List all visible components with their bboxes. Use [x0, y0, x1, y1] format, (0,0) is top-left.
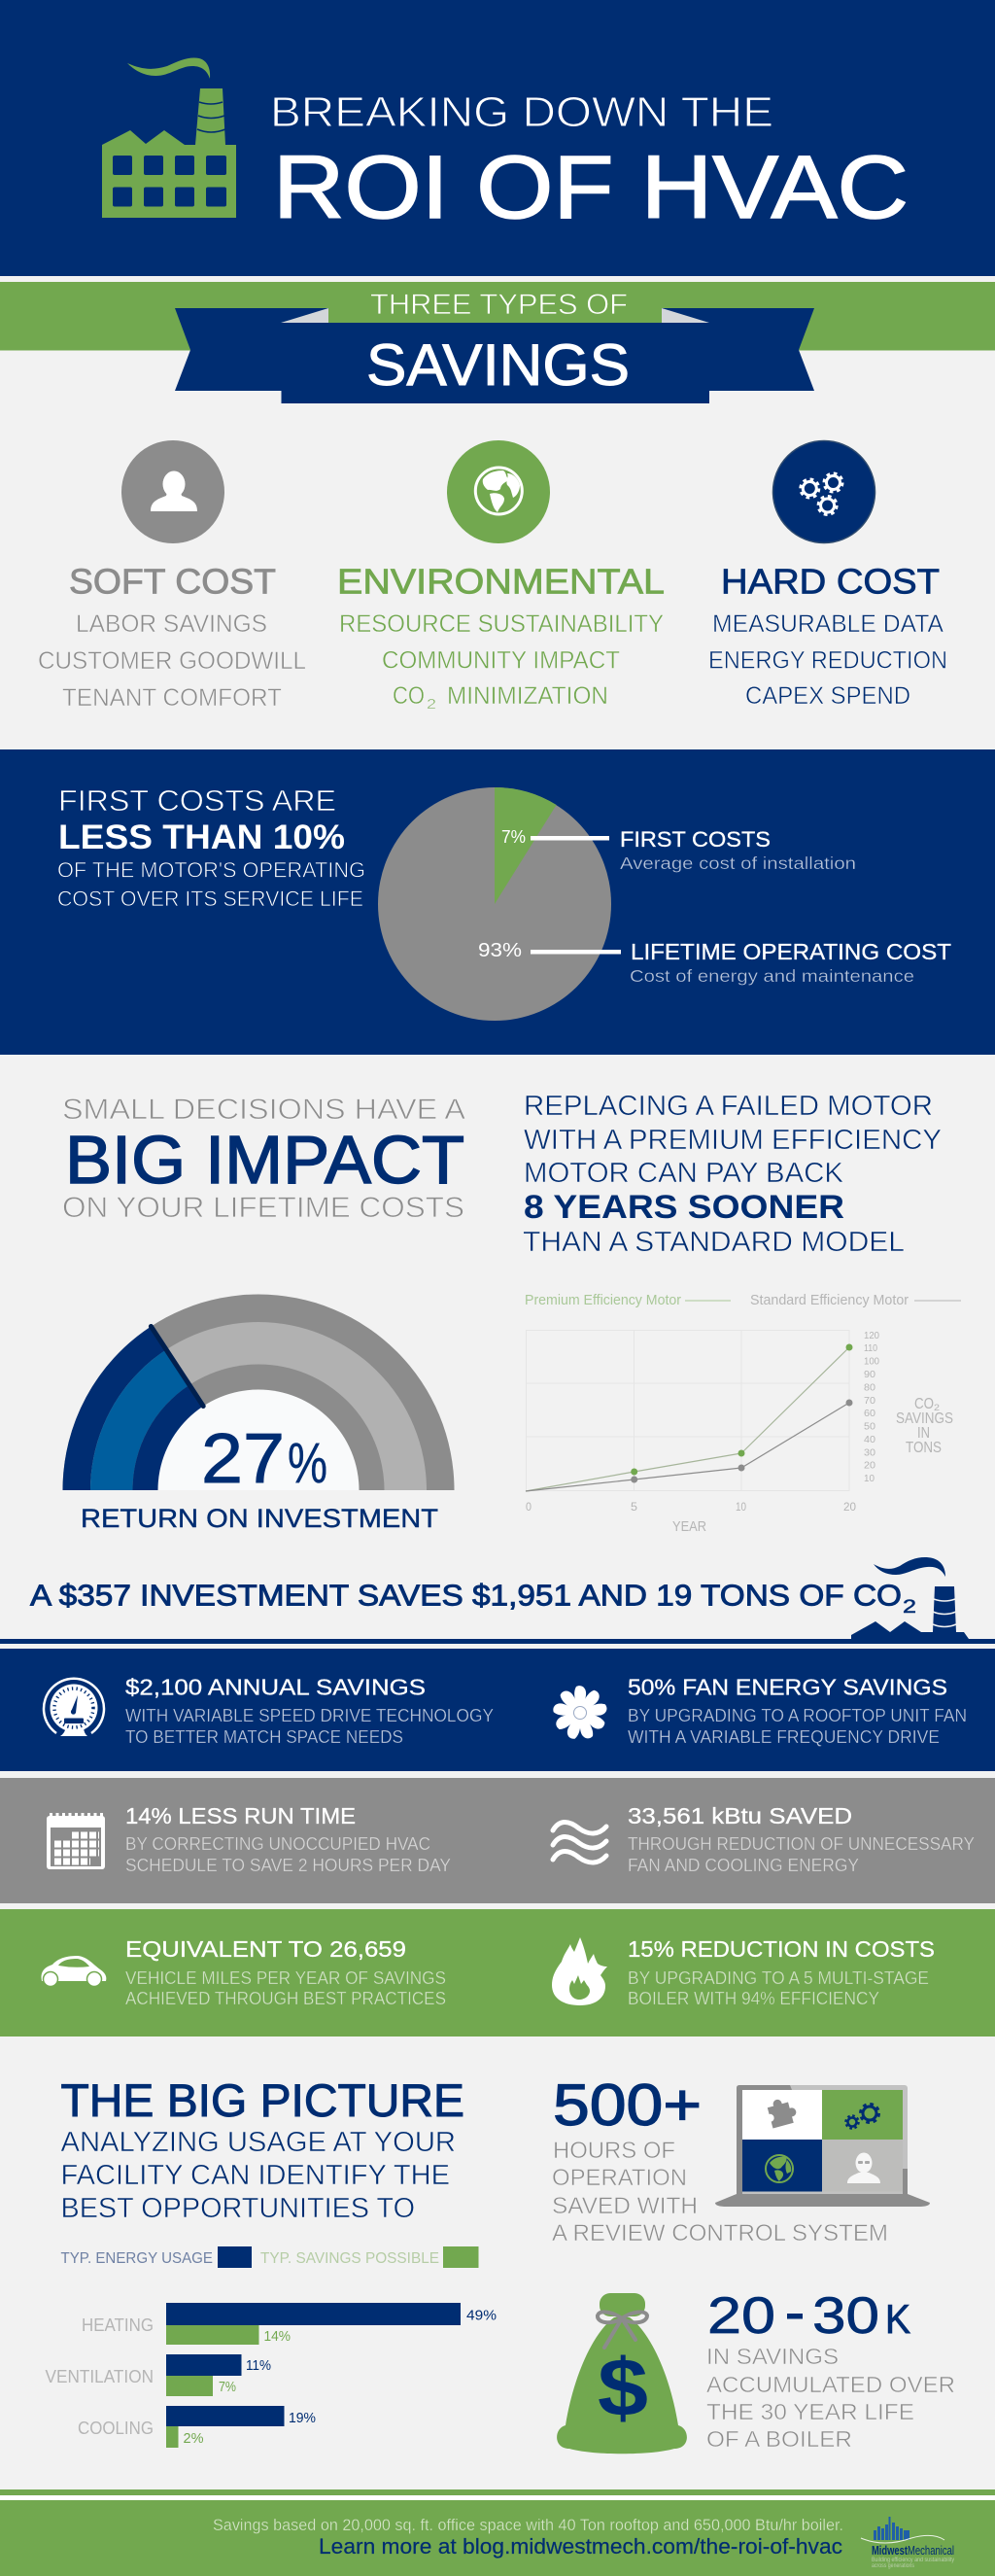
text: annual savings: $2,100 ANNUAL SAVINGS [125, 1674, 426, 1699]
text: vehicle miles: EQUIVALENT TO 26,659 [125, 1936, 406, 1962]
y axis title: SAVINGS [896, 1410, 953, 1427]
stat: 500+ hours: HOURS OF [553, 2138, 675, 2164]
hard cost list: ENERGY REDUCTION [708, 647, 947, 675]
panel: first costs [0, 749, 995, 1055]
logo: Midwest Mechanical: Midwest [872, 2543, 908, 2558]
environmental list: CO [393, 682, 425, 710]
bars: heating: 14% [264, 2328, 291, 2345]
footnote: Savings based on 20,000 sq. ft. office space with 40 Ton rooftop and 650,000 Btu/hr boiler. [213, 2516, 843, 2534]
banner heading [366, 289, 630, 398]
hard cost list: MEASURABLE DATA [712, 610, 944, 638]
heading: investment savings: 2 [903, 1597, 916, 1618]
y axis title: 2 [934, 1403, 940, 1412]
heading: big impact: BIG IMPACT [65, 1122, 464, 1198]
icon: car [41, 1956, 106, 1987]
text: less run time [125, 1803, 451, 1875]
text: motor payback: WITH A PREMIUM EFFICIENCY [524, 1125, 942, 1156]
big number: K [885, 2296, 910, 2342]
logo: Midwest Mechanical: Mechanical [908, 2543, 954, 2558]
icon: waves [553, 1822, 606, 1862]
gauge value: 27 [201, 1420, 285, 1498]
lifetime operating cost label: Cost of energy and maintenance [630, 966, 914, 986]
icon: calendar [47, 1816, 105, 1869]
category labels: HEATING [82, 2315, 154, 2335]
text: motor payback [523, 1091, 942, 1258]
logo: Midwest Mechanical [861, 2517, 954, 2569]
dollar sign: $ [598, 2342, 648, 2433]
heading: big impact: ON YOUR LIFETIME COSTS [62, 1192, 464, 1224]
bars: heating [166, 2303, 497, 2345]
icon: flame [552, 1937, 607, 2005]
y axis title: IN [917, 1425, 930, 1442]
big number: 30 [812, 2287, 879, 2345]
y axis labels [864, 1331, 879, 1484]
category labels: VENTILATION [45, 2367, 154, 2386]
chart legend: Standard Efficiency Motor [750, 1292, 909, 1308]
bars: ventilation: 7% [219, 2379, 236, 2395]
footer [0, 2489, 995, 2576]
panel: navy savings band [0, 1649, 995, 1771]
pie chart: 7% [501, 827, 526, 847]
text: less run time: 14% LESS RUN TIME [125, 1803, 356, 1828]
pie chart [378, 787, 621, 1021]
stat: 500+ hours: SAVED WITH [552, 2193, 698, 2219]
text: reduction in costs: 15% REDUCTION IN COSTS [628, 1936, 935, 1962]
text: vehicle miles: ACHIEVED THROUGH BEST PRACTICES [125, 1989, 446, 2008]
x axis labels: 20 [843, 1500, 856, 1514]
text: annual savings: TO BETTER MATCH SPACE NEEDS [125, 1727, 403, 1747]
header panel [0, 0, 995, 276]
text: reduction in costs: BY UPGRADING TO A 5 MULTI-STAGE [628, 1968, 929, 1988]
soft cost list: LABOR SAVINGS [76, 610, 267, 638]
bars: ventilation [166, 2354, 271, 2396]
bars: heating: 49% [466, 2308, 497, 2323]
environmental list: 2 [427, 696, 436, 713]
bow [598, 2312, 647, 2348]
heading: the big picture: BEST OPPORTUNITIES TO [60, 2193, 415, 2224]
y axis labels: 60 [864, 1409, 875, 1419]
text: reduction in costs [628, 1936, 935, 2008]
x axis labels [526, 1500, 856, 1535]
environmental list: MINIMIZATION [447, 682, 608, 710]
first costs statement [57, 783, 365, 911]
first costs statement: OF THE MOTOR'S OPERATING [57, 857, 365, 883]
panel: green savings band [0, 1909, 995, 2036]
first costs statement: FIRST COSTS ARE [58, 783, 336, 818]
soft cost list [38, 610, 306, 712]
chart legend: Premium Efficiency Motor [525, 1292, 681, 1308]
text: fan energy savings: WITH A VARIABLE FREQUENCY DRIVE [628, 1727, 940, 1747]
y axis labels: 100 [864, 1357, 879, 1367]
panel: environmental: ENVIRONMENTAL [337, 562, 665, 601]
logo: Midwest Mechanical: Building efficiency and sustainability [872, 2558, 954, 2563]
heading: the big picture: THE BIG PICTURE [60, 2075, 464, 2127]
text: vehicle miles: VEHICLE MILES PER YEAR OF SAVINGS [125, 1968, 446, 1988]
y axis labels: 80 [864, 1382, 875, 1394]
big number: 20 [707, 2287, 775, 2345]
panel: environmental [337, 440, 665, 713]
stat: 500+ hours: 500+ [553, 2072, 702, 2138]
lifetime operating cost label [630, 939, 951, 986]
banner heading: THREE TYPES OF [370, 289, 628, 321]
icon: globe [447, 440, 550, 543]
text: fan energy savings: 50% FAN ENERGY SAVINGS [628, 1674, 947, 1699]
text: reduction in costs: BOILER WITH 94% EFFICIENCY [628, 1989, 879, 2008]
savings banner [0, 282, 995, 403]
heading: the big picture: ANALYZING USAGE AT YOUR [60, 2127, 456, 2158]
icon: person with glasses [847, 2152, 880, 2183]
icon: puzzle piece [762, 2096, 799, 2129]
heading: investment savings: A $357 INVESTMENT SAVES $1,951 AND 19 TONS OF CO [30, 1579, 902, 1612]
text: motor payback: MOTOR CAN PAY BACK [524, 1158, 844, 1189]
panel: hard cost: HARD COST [721, 562, 940, 601]
text: kBtu saved: THROUGH REDUCTION OF UNNECESSARY [628, 1834, 975, 1854]
heading: the big picture: FACILITY CAN IDENTIFY THE [60, 2160, 450, 2191]
learn more link: Learn more at blog.midwestmech.com/the-roi-of-hvac [319, 2534, 842, 2559]
icon: navy gears [845, 2104, 878, 2129]
panel: soft cost [38, 440, 306, 712]
y axis labels: 110 [864, 1343, 877, 1354]
category labels [45, 2315, 154, 2438]
y axis labels: 50 [864, 1421, 875, 1433]
icon: money bag [557, 2293, 687, 2454]
chart legend [525, 1292, 961, 1308]
icon: navy factory silhouette and rule [0, 1557, 995, 1644]
x axis labels: 10 [736, 1500, 746, 1514]
bar chart legend: TYP. ENERGY USAGE [60, 2250, 213, 2267]
text: fan energy savings [628, 1674, 967, 1747]
gauge: return on investment: RETURN ON INVESTMENT [81, 1504, 438, 1533]
first costs label [620, 827, 856, 873]
x axis labels: 5 [631, 1500, 637, 1514]
stat: 500+ hours: OPERATION [552, 2165, 687, 2191]
stat: 20-30k savings: THE 30 YEAR LIFE [706, 2399, 914, 2424]
icon: laptop [715, 2085, 930, 2207]
bar chart legend: TYP. SAVINGS POSSIBLE [260, 2250, 439, 2267]
y axis labels: 30 [864, 1448, 875, 1458]
panel: soft cost: SOFT COST [69, 562, 276, 601]
environmental list: COMMUNITY IMPACT [382, 647, 620, 675]
bars: cooling: 2% [183, 2430, 204, 2447]
logo: Midwest Mechanical: across generations [872, 2563, 914, 2569]
text: annual savings: WITH VARIABLE SPEED DRIVE TECHNOLOGY [125, 1706, 494, 1725]
x axis labels: 0 [526, 1500, 532, 1514]
banner heading: SAVINGS [366, 332, 630, 398]
soft cost list: CUSTOMER GOODWILL [38, 647, 306, 675]
icon: speedometer [44, 1679, 104, 1736]
gauge value: % [288, 1432, 327, 1495]
bars: cooling [166, 2406, 316, 2448]
panel: grey savings band [0, 1778, 995, 1903]
y axis title: CO [914, 1396, 934, 1412]
text: motor payback: 8 YEARS SOONER [524, 1189, 844, 1226]
environmental list: RESOURCE SUSTAINABILITY [339, 610, 664, 638]
gauge value [201, 1420, 327, 1498]
lifetime operating cost label: LIFETIME OPERATING COST [631, 939, 951, 964]
panel: hard cost [708, 441, 947, 710]
title [270, 88, 909, 237]
heading: big impact [62, 1094, 465, 1224]
text: annual savings [125, 1674, 494, 1747]
stat: 500+ hours [552, 2072, 888, 2246]
text: kBtu saved [628, 1803, 975, 1875]
first costs statement: LESS THAN 10% [58, 818, 345, 856]
bars: ventilation: 11% [246, 2357, 271, 2374]
ribbon tails [175, 282, 814, 391]
environmental list [339, 610, 664, 713]
icon: person [121, 440, 224, 543]
x axis labels: YEAR [672, 1518, 706, 1535]
text: fan energy savings: BY UPGRADING TO A ROOFTOP UNIT FAN [628, 1706, 967, 1725]
stat: 500+ hours: A REVIEW CONTROL SYSTEM [552, 2220, 888, 2246]
hard cost list: CAPEX SPEND [745, 682, 910, 710]
text: kBtu saved: 33,561 kBtu SAVED [628, 1803, 852, 1828]
y axis labels: 70 [864, 1396, 875, 1407]
stat: 20-30k savings: ACCUMULATED OVER [706, 2372, 955, 2397]
bars: cooling: 19% [289, 2410, 316, 2426]
first costs statement: COST OVER ITS SERVICE LIFE [57, 887, 363, 911]
text: motor payback: REPLACING A FAILED MOTOR [524, 1091, 933, 1122]
title: BREAKING DOWN THE [270, 88, 773, 136]
bar chart: usage and savings [45, 2246, 497, 2448]
soft cost list: TENANT COMFORT [62, 684, 282, 712]
stat: 20-30k savings [706, 2287, 955, 2452]
stat: 20-30k savings: IN SAVINGS [706, 2344, 839, 2369]
icon: gears [773, 441, 875, 542]
y axis labels: 10 [864, 1474, 875, 1484]
y axis labels: 90 [864, 1370, 875, 1380]
hard cost list [708, 610, 947, 710]
icon: small globe [766, 2155, 793, 2182]
heading: the big picture [60, 2075, 464, 2224]
y axis labels: 20 [864, 1460, 875, 1472]
text: less run time: BY CORRECTING UNOCCUPIED HVAC [125, 1834, 430, 1854]
text: kBtu saved: FAN AND COOLING ENERGY [628, 1856, 859, 1875]
y axis title [896, 1396, 953, 1456]
text: vehicle miles [125, 1936, 446, 2008]
first costs label: Average cost of installation [620, 853, 856, 873]
gauge: return on investment [62, 1295, 454, 1533]
first costs label: FIRST COSTS [620, 827, 771, 852]
text: motor payback: THAN A STANDARD MODEL [523, 1227, 905, 1258]
y axis labels: 120 [864, 1331, 879, 1341]
pie chart: 93% [478, 940, 522, 961]
title: ROI OF HVAC [273, 138, 909, 237]
category labels: COOLING [78, 2419, 154, 2438]
icon: factory with smoke [102, 57, 236, 218]
icon: fan [553, 1686, 608, 1740]
text: less run time: SCHEDULE TO SAVE 2 HOURS PER DAY [125, 1856, 451, 1875]
line chart: CO2 savings [525, 1292, 961, 1535]
stat: 20-30k savings: OF A BOILER [706, 2426, 852, 2452]
big number [707, 2287, 910, 2345]
y axis labels: 40 [864, 1435, 875, 1445]
y axis title: TONS [906, 1440, 942, 1456]
heading: big impact: SMALL DECISIONS HAVE A [62, 1094, 465, 1126]
bar chart legend [60, 2246, 478, 2268]
